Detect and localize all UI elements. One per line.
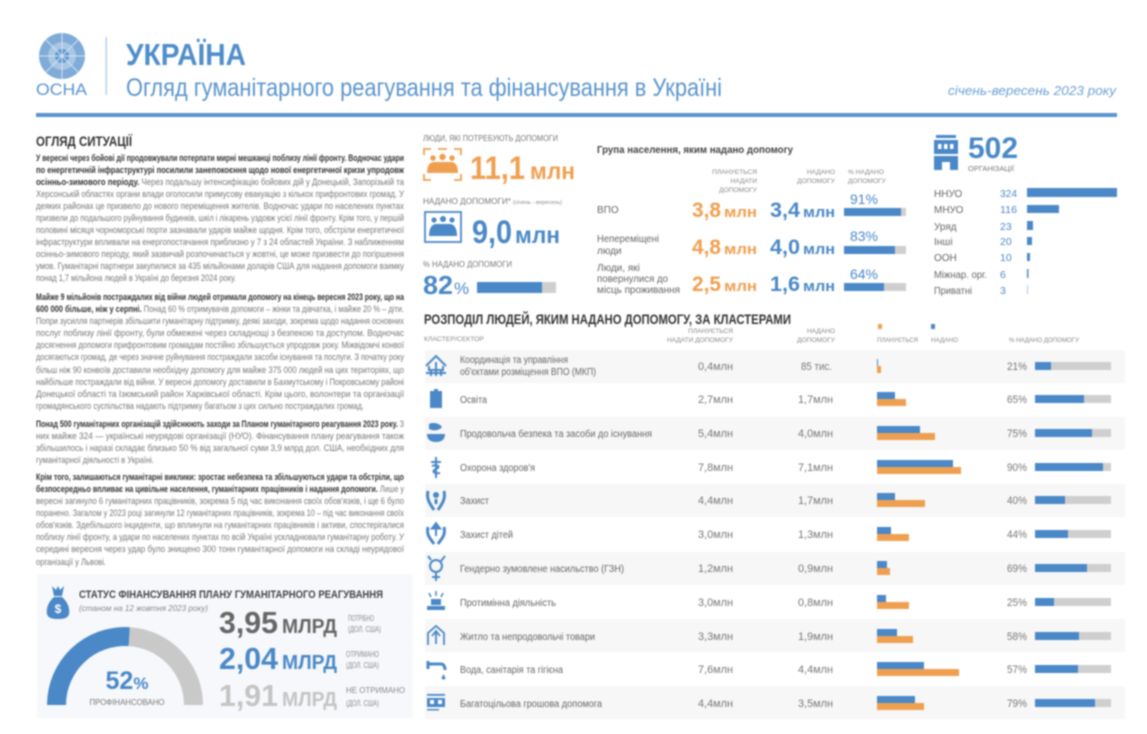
cluster row: shelter and NFIs: 58% [1007,631,1027,643]
row: non-displaced people: млн [724,241,757,258]
text block: overview paragraph 3 [36,418,405,465]
panel: people reached [423,197,562,250]
text block: overview paragraph 2: громадянського суспільства надають підтримку багатьом з цих сильно постраждалих громад. [36,400,364,411]
cluster row: CCCM: 85 тис. [801,361,832,373]
panel: percent reached [423,260,556,300]
cluster row: education: 65% [1007,394,1027,406]
text block: overview paragraph 1: осінньо-зимового періоду. Через подальшу інтенсифікацію бойових дій у Донецькій, Запорізькій та [36,176,405,187]
cluster row: CCCM: Координація та управління [460,355,568,366]
stat: not received: НЕ ОТРИМАНО [346,686,405,695]
cluster row: CCCM [426,355,1111,378]
panel: people in need: млн [530,158,575,184]
text block: overview paragraph 1: понад 1,7 мільйона людей в Україні до березня 2024 року. [36,272,236,283]
stat: not received: (ДОЛ. США) [346,699,379,708]
row: non-displaced people: Неперeміщені [597,234,659,245]
logo: OCHA [36,33,88,99]
cluster row: education: Освіта [460,395,487,406]
panel: percent reached: 82 [423,270,453,300]
icon: shelter [428,626,444,645]
stat: required: 3,95 [219,605,278,640]
bar chart: organisation types: МНУО [934,205,964,216]
row: IDPs: 91% [850,191,878,207]
bar chart: organisation types: 3 [1000,285,1006,297]
cluster row: education: 2,7млн [698,394,733,406]
table header and legend: НАДАНО [931,337,958,344]
cluster row: mine action: 3,0млн [698,597,733,609]
icon: tap [428,661,446,680]
column headers: ПЛАНУЄТЬСЯ [712,169,757,176]
text block: overview paragraph 4: середині вересня через удар було знищено 300 тонн гуманітарної допомоги на складі неурядової [36,543,404,554]
panel: people in need: ЛЮДИ, ЯКІ ПОТРЕБУЮТЬ ДОПОМОГИ [423,134,558,143]
row: returnees: млн [724,278,757,295]
text block: overview paragraph 1: У вересні через бойові дії продовжували потерпати мирні мешканці поблизу лінії фронту. Водночас удари [36,152,404,163]
text block: overview paragraph 2: 600 000 більше, ніж у серпні. Понад 60 % отримувачів допомоги – жінки та дівчатка, і майже 20 % – діти. [36,303,404,314]
text block: overview paragraph 1: інфраструктури впливали на енергопостачання приблизно у 7 з 24 областей України. З наближенням [36,236,404,247]
logo: OCHA: OCHA [36,80,88,99]
row: IDPs: ВПО [597,205,619,216]
bar chart: organisation types [934,188,1117,297]
cluster row: health: 90% [1007,462,1027,474]
cluster row: GBV: 0,9млн [798,563,833,575]
cluster row: CCCM: 21% [1007,361,1027,373]
icon: building [934,135,958,170]
text block: overview paragraph 1: половині місяця чорноморські порти зазнавали ударів майже щодня. Крім того, обстріли енергетичної [36,224,404,235]
row: returnees: 1,6 [770,273,800,296]
text block: overview paragraph 4: безпосередньо впливає на цивільне населення, гуманітарних працівників і надання допомоги. Лише у [36,483,404,494]
text block: overview paragraph 2: послуг поблизу лінії фронту, були обмежені через складнощі з безпекою та доступом. Водночас [36,327,404,338]
icon: money bag [47,586,69,619]
panel: people reached: НАДАНО ДОПОМОГИ* [423,197,511,206]
text block: overview paragraph 1: осінньо-зимового періоду, який зазвичай розпочинається у жовтні, це може призвести до погіршення [36,248,404,259]
stat: received: 2,04 [219,641,279,676]
text block: overview paragraph 3: збільшилось і наразі складає близько 50 % від загальної суми 3,9 млрд дол. США, необхідних для [36,442,404,453]
cluster row: WASH: 4,4млн [798,664,833,676]
table header and legend: КЛАСТЕР/СЕКТОР [424,336,485,343]
icon: mine [427,591,445,610]
stat: not received: МЛРД [282,689,337,711]
bar chart: organisation types: 6 [1000,269,1006,281]
text block: overview paragraph 4: вересні загинуло 6 гуманітарних працівників, зокрема 5 під час виконання своїх обов'язків, і ще 6 було [36,495,404,506]
text block: overview paragraph 2: Попри зусилля партнерів збільшити гуманітарну підтримку, деякі заходи, зокрема щодо надання основних [36,315,404,326]
row: IDPs: 3,4 [770,199,800,222]
table header and legend: % НАДАНО ДОПОМОГУ [1009,337,1080,344]
row: non-displaced people: люди [597,246,622,257]
panel: organisations: 502 [968,132,1018,165]
icon: gender [428,556,445,581]
bar chart: organisation types: Міжнар. орг. [934,270,987,281]
text block: overview paragraph 2: Майже 9 мільйонів постраждалих від війни людей отримали допомогу на кінець вересня 2023 року, що на [36,291,405,302]
icon: people blue [425,212,461,242]
cluster row: food security: 4,0млн [798,428,833,440]
panel: people in need: 11,1 [470,150,525,186]
cluster row: child protection: 44% [1007,529,1027,541]
funding date: (станом на 12 жовтня 2023 року) [79,603,208,613]
gauge chart: 52% funded: ПРОФІНАНСОВАНО [90,697,165,707]
cluster row: education: 1,7млн [798,394,833,406]
title: УКРАЇНА [126,37,246,72]
icon: people orange [424,149,461,180]
bar chart: organisation types: ННУО [934,189,962,200]
panel: percent reached: % НАДАНО ДОПОМОГИ [423,260,512,269]
row: non-displaced people: млн [803,241,835,258]
row: returnees: млн [803,278,835,295]
column headers: ДОПОМОГУ [719,187,758,194]
cluster row: multipurpose cash [427,694,1111,710]
stat: not received [219,678,405,713]
funding title: СТАТУС ФІНАНСУВАННЯ ПЛАНУ ГУМАНІТАРНОГО РЕАГУВАННЯ [79,589,383,601]
gauge chart: 52% funded [47,627,203,707]
row: returnees: Люди, які [597,263,640,274]
column headers: НАДАНО [807,169,835,176]
stat: required: ПОТРІБНО [348,614,374,623]
heading: situation overview: ОГЛЯД СИТУАЦІЇ [36,133,133,149]
stat: received: (ДОЛ. США) [346,661,379,670]
panel: population groups reached [597,144,906,296]
text block: overview paragraph 4: обов'язків. Здебільшого інциденти, що вплинули на гуманітарних працівників і активи, спостерігалися [36,519,404,530]
cluster row: shelter and NFIs: 1,9млн [798,631,833,643]
row bands [425,350,1125,383]
cluster row: food security [427,423,1111,442]
text block: overview paragraph 1: умов. Гуманітарні партнери закупилися за 435 мільйонами доларів США для надання допомоги взимку [36,260,404,271]
table header and legend: ДОПОМОГУ [797,337,836,344]
column headers [712,169,887,194]
cluster row: multipurpose cash: Багатоцільова грошова допомога [460,699,602,710]
cluster row: shelter and NFIs [428,626,1111,645]
cluster row: mine action: 0,8млн [798,597,833,609]
bar chart: organisation types: 23 [1000,221,1012,233]
cluster row: protection: 1,7млн [798,495,833,507]
cluster row: shelter and NFIs: Житло та непродовольчі товари [460,632,595,643]
table header and legend [424,324,1080,344]
text block: overview paragraph 4 [36,471,404,567]
stat: not received: 1,91 [219,678,278,713]
text block: overview paragraph 2 [36,291,405,411]
table header and legend: ПЛАНУЄТЬСЯ [877,337,918,344]
icon: camp [426,356,446,376]
column headers: ДОПОМОГУ [848,178,887,185]
text block: overview paragraph 2: досягнення допомоги прифронтовим громадам постійно збільшується упродовж року. Міжвідомчі конвої [36,339,404,350]
icon: child protection [428,524,444,544]
bar chart: organisation types: Приватні [934,286,972,297]
icon: health staff [431,457,441,478]
bar chart: organisation types: Інші [934,237,953,248]
text block: overview paragraph 2: більш ніж 90 конвоїв доставили необхідну допомогу для майже 375 000 людей на цих територіях, що [36,364,404,375]
icon: education [430,389,442,408]
text block: overview paragraph 4: поранено. Загалом у 2023 році загинули 12 гуманітарних працівників, зокрема 10 – під час виконання своїх [36,507,404,518]
bar chart: organisation types: 116 [1000,204,1017,216]
table header and legend: НАДАТИ ДОПОМОГУ [667,337,734,344]
cluster row: health: 7,1млн [798,462,833,474]
cluster row: health: Охорона здоров'я [460,463,535,474]
text block: overview paragraph 4: Крім того, залишаються гуманітарні виклики: зростає небезпека та збільшуються удари та обстріли, що [36,471,404,482]
subtitle: Огляд гуманітарного реагування та фінансування в Україні [126,74,722,102]
cluster row: health [431,457,1111,478]
stat: received: ОТРИМАНО [346,650,379,659]
text block: overview paragraph 1 [36,152,405,283]
column headers: ДОПОМОГУ [797,178,836,185]
icon: protection [428,491,444,510]
panel: people reached: млн [515,222,560,248]
cluster row: child protection: 3,0млн [698,529,733,541]
cluster row: shelter and NFIs: 3,3млн [698,631,733,643]
text block: overview paragraph 3: Понад 500 гуманітарних організацій здійснюють заходи за Планом гуманітарного реагування 2023 року. З [36,418,404,429]
cluster row: education [430,389,1111,408]
cluster row: protection [428,491,1111,510]
stat: required: МЛРД [282,616,337,638]
cluster row: GBV [428,556,1111,581]
cluster row: multipurpose cash: 3,5млн [798,698,833,710]
row: returnees: 2,5 [692,273,721,296]
row: IDPs: млн [724,204,757,221]
cluster row: mine action: 25% [1007,597,1027,609]
table header and legend: ПЛАНУЄТЬСЯ [688,328,733,335]
bar chart: organisation types: 10 [1000,252,1012,264]
stat: received [219,641,379,676]
cluster row: mine action: Протимінна діяльність [460,598,556,609]
panel: organisations: ОРГАНІЗАЦІЇ [968,165,1014,173]
cluster row: GBV: Гендерно зумовлене насильство (ГЗН) [460,564,624,575]
text block: overview paragraph 4: організації у Львові. [36,556,106,567]
stat: required [219,605,381,640]
bar chart: organisation types: ООН [934,253,957,264]
cluster row: GBV: 1,2млн [698,563,733,575]
cluster row: child protection: Захист дітей [460,530,513,541]
cluster row: protection: 40% [1007,495,1027,507]
column headers: НАДАТИ [730,178,757,185]
table header and legend: НАДАНО [807,328,835,335]
panel: percent reached: % [454,279,469,298]
text block: overview paragraph 2: досягаються громад, де через значне руйнування постраждали засоби існування та послуги. З початку року [36,351,404,362]
text block: overview paragraph 3: гуманітарної діяльності в Україні. [36,454,154,465]
panel: population groups reached: Група населення, яким надано допомогу [597,144,793,156]
cluster row: health: 7,8млн [698,462,733,474]
row: IDPs: 3,8 [692,199,721,222]
stat: required: (ДОЛ. США) [348,625,381,634]
row: returnees: місць проживання [597,285,680,296]
bar chart: organisation types: 324 [1000,188,1017,200]
row: non-displaced people: 4,8 [692,236,721,259]
panel: people reached: (січень - вересень) [513,200,562,206]
bar chart: organisation types: Уряд [934,222,957,233]
text block: overview paragraph 1: по енергетичній інфраструктурі посилили занепокоєння щодо нової енергетичної кризи упродовж [36,164,404,175]
cluster row: CCCM: 0,4млн [698,361,733,373]
date range: січень-вересень 2023 року [948,83,1118,98]
row: non-displaced people [597,228,906,259]
cluster row: WASH: Вода, санітарія та гігієна [460,665,563,676]
cluster row: CCCM: об'єктами розміщення ВПО (МКП) [460,366,596,378]
cluster row: GBV: 69% [1007,563,1027,575]
text block: overview paragraph 1: призвели до подальшого руйнування будинків, шкіл і лікарень уздовж усієї лінії фронту. Крім того, у першій [36,212,404,223]
cluster row: food security: Продовольча безпека та засоби до існування [460,428,652,440]
progress bar 82% [477,282,556,293]
text block: overview paragraph 1: Херсонській областях органи влади оголосили примусову евакуацію з кількох прифронтових громад. У [36,188,404,199]
text block: overview paragraph 2: Донецької області та Ізюмський район Харківської області. Крім цього, волонтери та організації [36,388,404,399]
panel: funding status [37,574,413,718]
icon: cash [427,694,445,710]
row: returnees [597,263,906,296]
cluster row: child protection: 1,3млн [798,529,833,541]
row: IDPs: млн [803,204,835,221]
column headers: % НАДАНО [848,169,884,176]
row: returnees: 64% [850,266,878,282]
panel: people in need [423,134,575,186]
panel: people reached: 9,0 [472,214,512,250]
cluster row: WASH: 7,6млн [698,664,733,676]
icon: money bag: $ [55,602,62,616]
bar chart: organisation types: 20 [1000,236,1012,248]
row: non-displaced people: 4,0 [770,236,800,259]
cluster row: mine action [427,591,1111,610]
cluster row: multipurpose cash: 4,4млн [698,698,733,710]
cluster row: protection: 4,4млн [698,495,733,507]
text block: overview paragraph 2: найбільше постраждали від війни. У вересні допомогу доставили в Бахмутському і Покровському районі [36,376,404,387]
row: non-displaced people: 83% [850,228,878,244]
cluster row: protection: Захист [460,496,489,507]
stat: received: МЛРД [282,652,337,674]
row: IDPs [597,191,906,222]
cluster row: food security: 75% [1007,428,1027,440]
gauge chart: 52% funded: 52% [106,667,148,695]
panel: organisations [934,132,1117,297]
text block: overview paragraph 3: них майже 324 — українські неурядові організації (НУО). Фінансування плану реагування також [36,430,405,441]
cluster row: multipurpose cash: 79% [1007,698,1027,710]
cluster row: WASH [428,661,1111,680]
text block: overview paragraph 1: деяких районах це призвело до нового переміщення жителів. Водночас удари по населених пунктах [36,200,404,211]
icon: food bowl [427,423,445,442]
heading: clusters: РОЗПОДІЛ ЛЮДЕЙ, ЯКИМ НАДАНО ДОПОМОГУ, ЗА КЛАСТЕРАМИ [424,310,791,327]
cluster row: child protection [428,524,1111,544]
cluster row: WASH: 57% [1007,664,1027,676]
row: returnees: повернулися до [597,274,668,285]
cluster row: food security: 5,4млн [698,428,733,440]
text block: overview paragraph 4: поблизу лінії фронту, а удари по населених пунктах по всій Україні ускладнювали гуманітарну роботу. У [36,531,404,542]
